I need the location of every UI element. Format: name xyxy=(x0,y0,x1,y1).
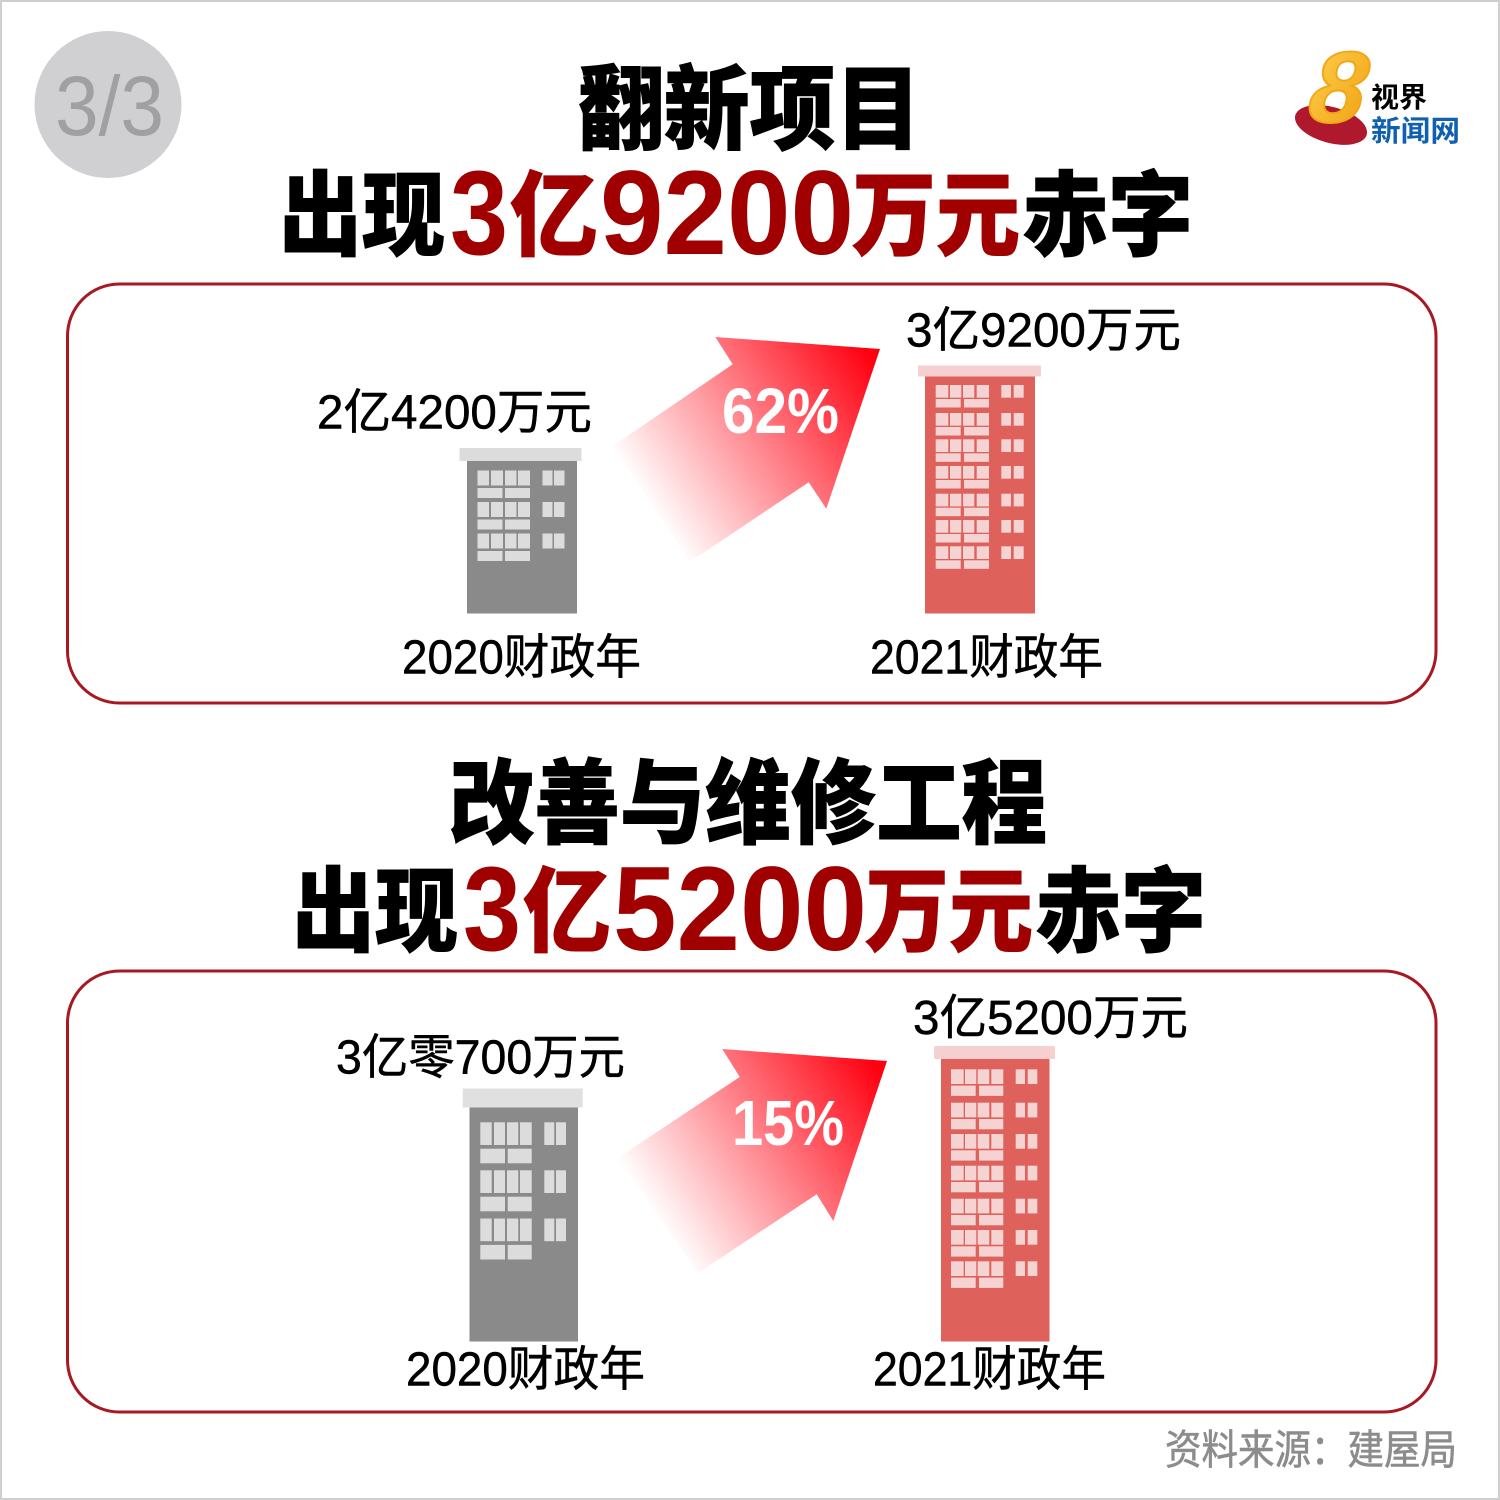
building red 2021 xyxy=(918,366,1041,614)
source note: 资料来源：建屋局 xyxy=(1165,1427,1457,1473)
year label 2021: 2021财政年 xyxy=(870,632,1103,684)
title 2: 3 xyxy=(463,842,521,976)
title 1: 万元 xyxy=(852,142,1020,275)
arrow 15% xyxy=(617,1049,887,1273)
logo: 8视界新闻网: 8 xyxy=(1303,30,1376,144)
value 2020: 2亿4200万元 xyxy=(317,386,592,440)
value 2021: 3亿9200万元 xyxy=(906,304,1181,358)
panel 1 xyxy=(68,284,1436,703)
title 1: 9200 xyxy=(600,146,854,280)
title 2: 万元 xyxy=(865,838,1033,971)
title 2: 赤字 xyxy=(1036,838,1206,971)
arrow 15%: 15% xyxy=(732,1087,844,1159)
title 2 xyxy=(292,730,1206,976)
arrow 62% xyxy=(613,337,880,562)
year label 2020: 2020财政年 xyxy=(406,1344,645,1396)
page badge 3/3 xyxy=(34,31,182,178)
title 1: 3 xyxy=(450,146,508,280)
building gray 2020 xyxy=(463,1088,583,1342)
title 1: 出现 xyxy=(279,142,445,275)
page badge 3/3: 3/3 xyxy=(55,59,164,153)
title 2: 出现 xyxy=(292,838,458,971)
arrow 62%: 62% xyxy=(722,375,839,447)
title 1: 翻新项目 xyxy=(578,36,921,169)
title 1 xyxy=(279,36,1193,280)
logo: 8视界新闻网: 视界 xyxy=(1371,76,1427,116)
title 2: 亿 xyxy=(523,838,611,971)
value 2021: 3亿5200万元 xyxy=(913,992,1188,1045)
value 2020: 3亿零700万元 xyxy=(336,1032,625,1084)
building gray 2020 xyxy=(460,448,582,614)
year label 2020: 2020财政年 xyxy=(402,632,641,684)
title 2: 改善与维修工程 xyxy=(449,730,1047,863)
building red 2021 xyxy=(934,1046,1055,1342)
title 2: 5200 xyxy=(613,842,867,976)
title 1: 赤字 xyxy=(1023,142,1193,275)
title 1: 亿 xyxy=(510,142,598,275)
logo: 8视界新闻网 xyxy=(1291,30,1460,152)
year label 2021: 2021财政年 xyxy=(873,1344,1106,1396)
logo: 8视界新闻网: 新闻网 xyxy=(1371,108,1460,150)
panel 2 xyxy=(68,971,1436,1412)
